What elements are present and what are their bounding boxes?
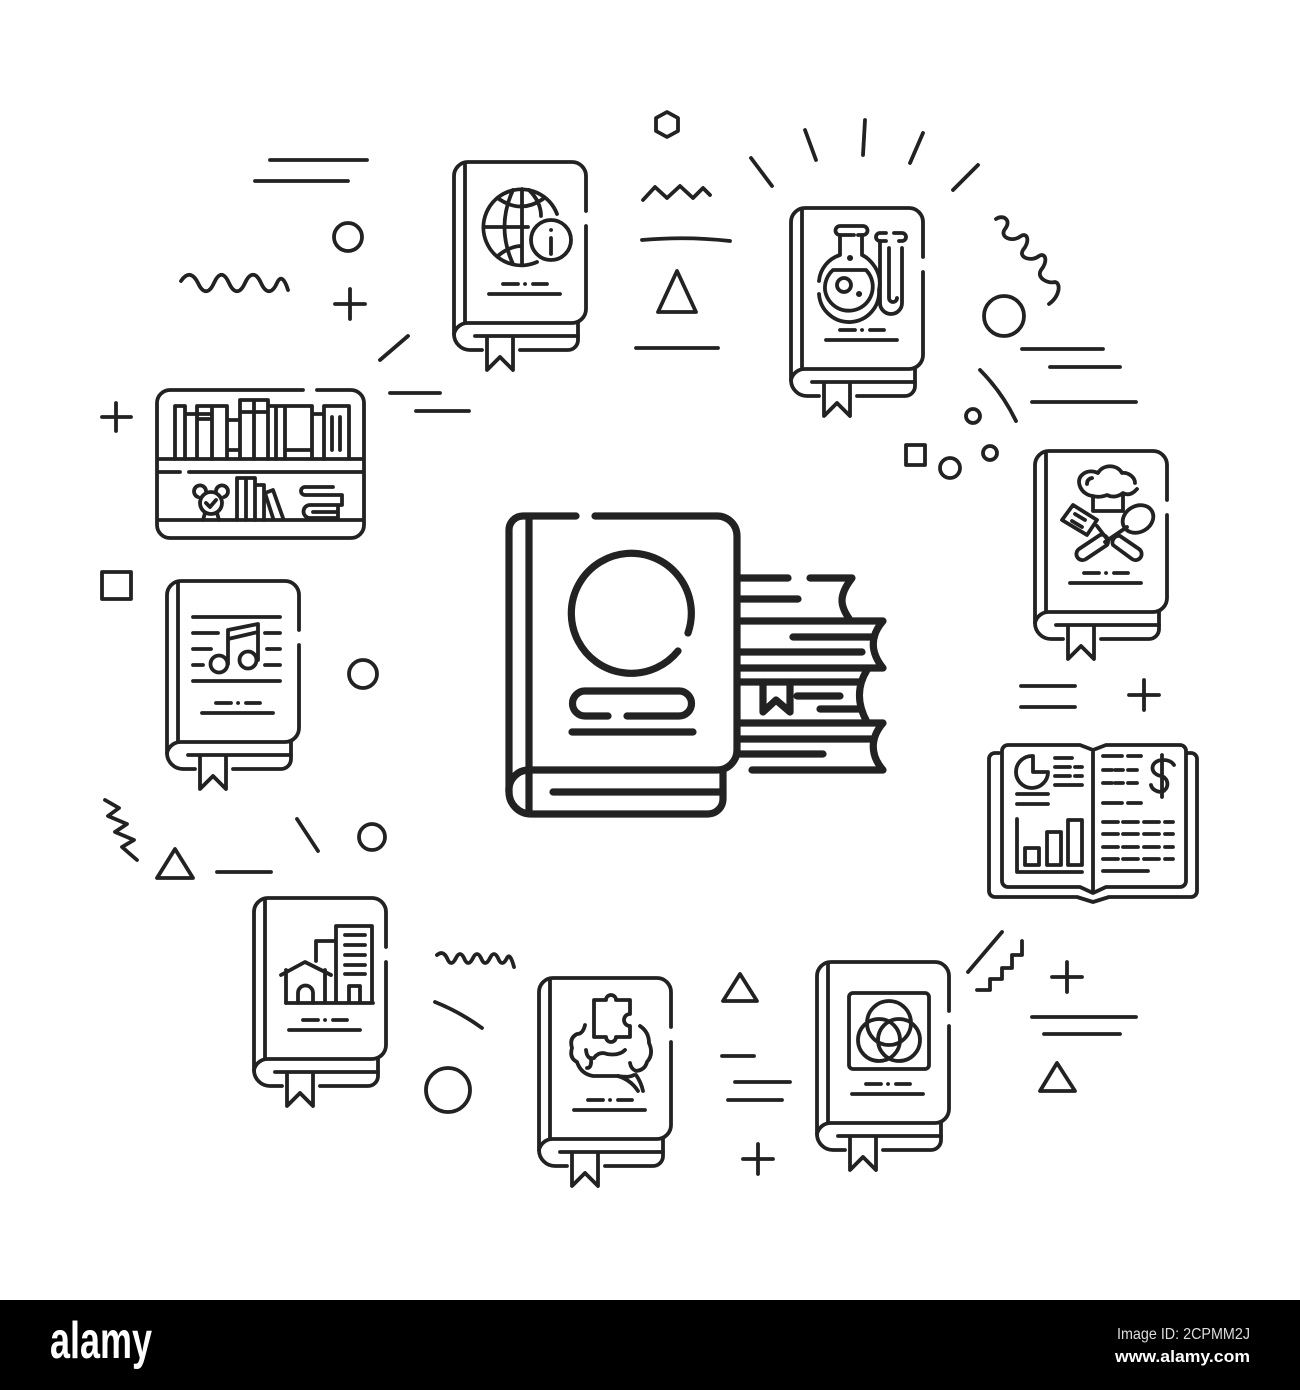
flask and test tube (819, 226, 906, 322)
pie chart and text (1016, 756, 1082, 804)
website: www.alamy.com (1114, 1347, 1250, 1366)
table and text rows (1103, 756, 1173, 871)
central book with stack (509, 516, 883, 814)
house and tower (281, 926, 373, 1003)
decorative geometric accents (102, 112, 1159, 1174)
icon: cookbook (1035, 451, 1167, 659)
alarm clock (194, 485, 228, 520)
bar chart (1017, 819, 1082, 872)
chef hat and utensils (1062, 466, 1158, 560)
icon: chemistry book (791, 208, 923, 416)
dollar sign (1151, 755, 1174, 797)
lower row of books (237, 478, 283, 520)
icon: bookshelf (157, 390, 364, 538)
shelf frame (157, 390, 364, 538)
main book cover (509, 516, 737, 814)
icon: globe info book (454, 162, 586, 370)
icon: psychology book (539, 978, 671, 1186)
icon: architecture book (254, 898, 386, 1106)
image id: Image ID: 2CPMM2J (1117, 1326, 1250, 1343)
footer bar (0, 1300, 1300, 1390)
upper row of books (175, 400, 349, 459)
stack of books behind (737, 578, 883, 770)
open book outline (989, 753, 1197, 902)
stacked books (301, 487, 342, 518)
alamy logo: alamy (50, 1312, 152, 1370)
icon: music book (167, 581, 299, 789)
icon: open finance book (989, 745, 1197, 902)
icon: color theory book (817, 962, 949, 1170)
musical note on staff (193, 617, 280, 681)
cover circle emblem (571, 553, 691, 673)
framed overlapping circles (849, 993, 929, 1069)
globe and info badge (483, 189, 571, 265)
cover title capsule and line (572, 691, 693, 732)
brain and puzzle (571, 995, 651, 1091)
